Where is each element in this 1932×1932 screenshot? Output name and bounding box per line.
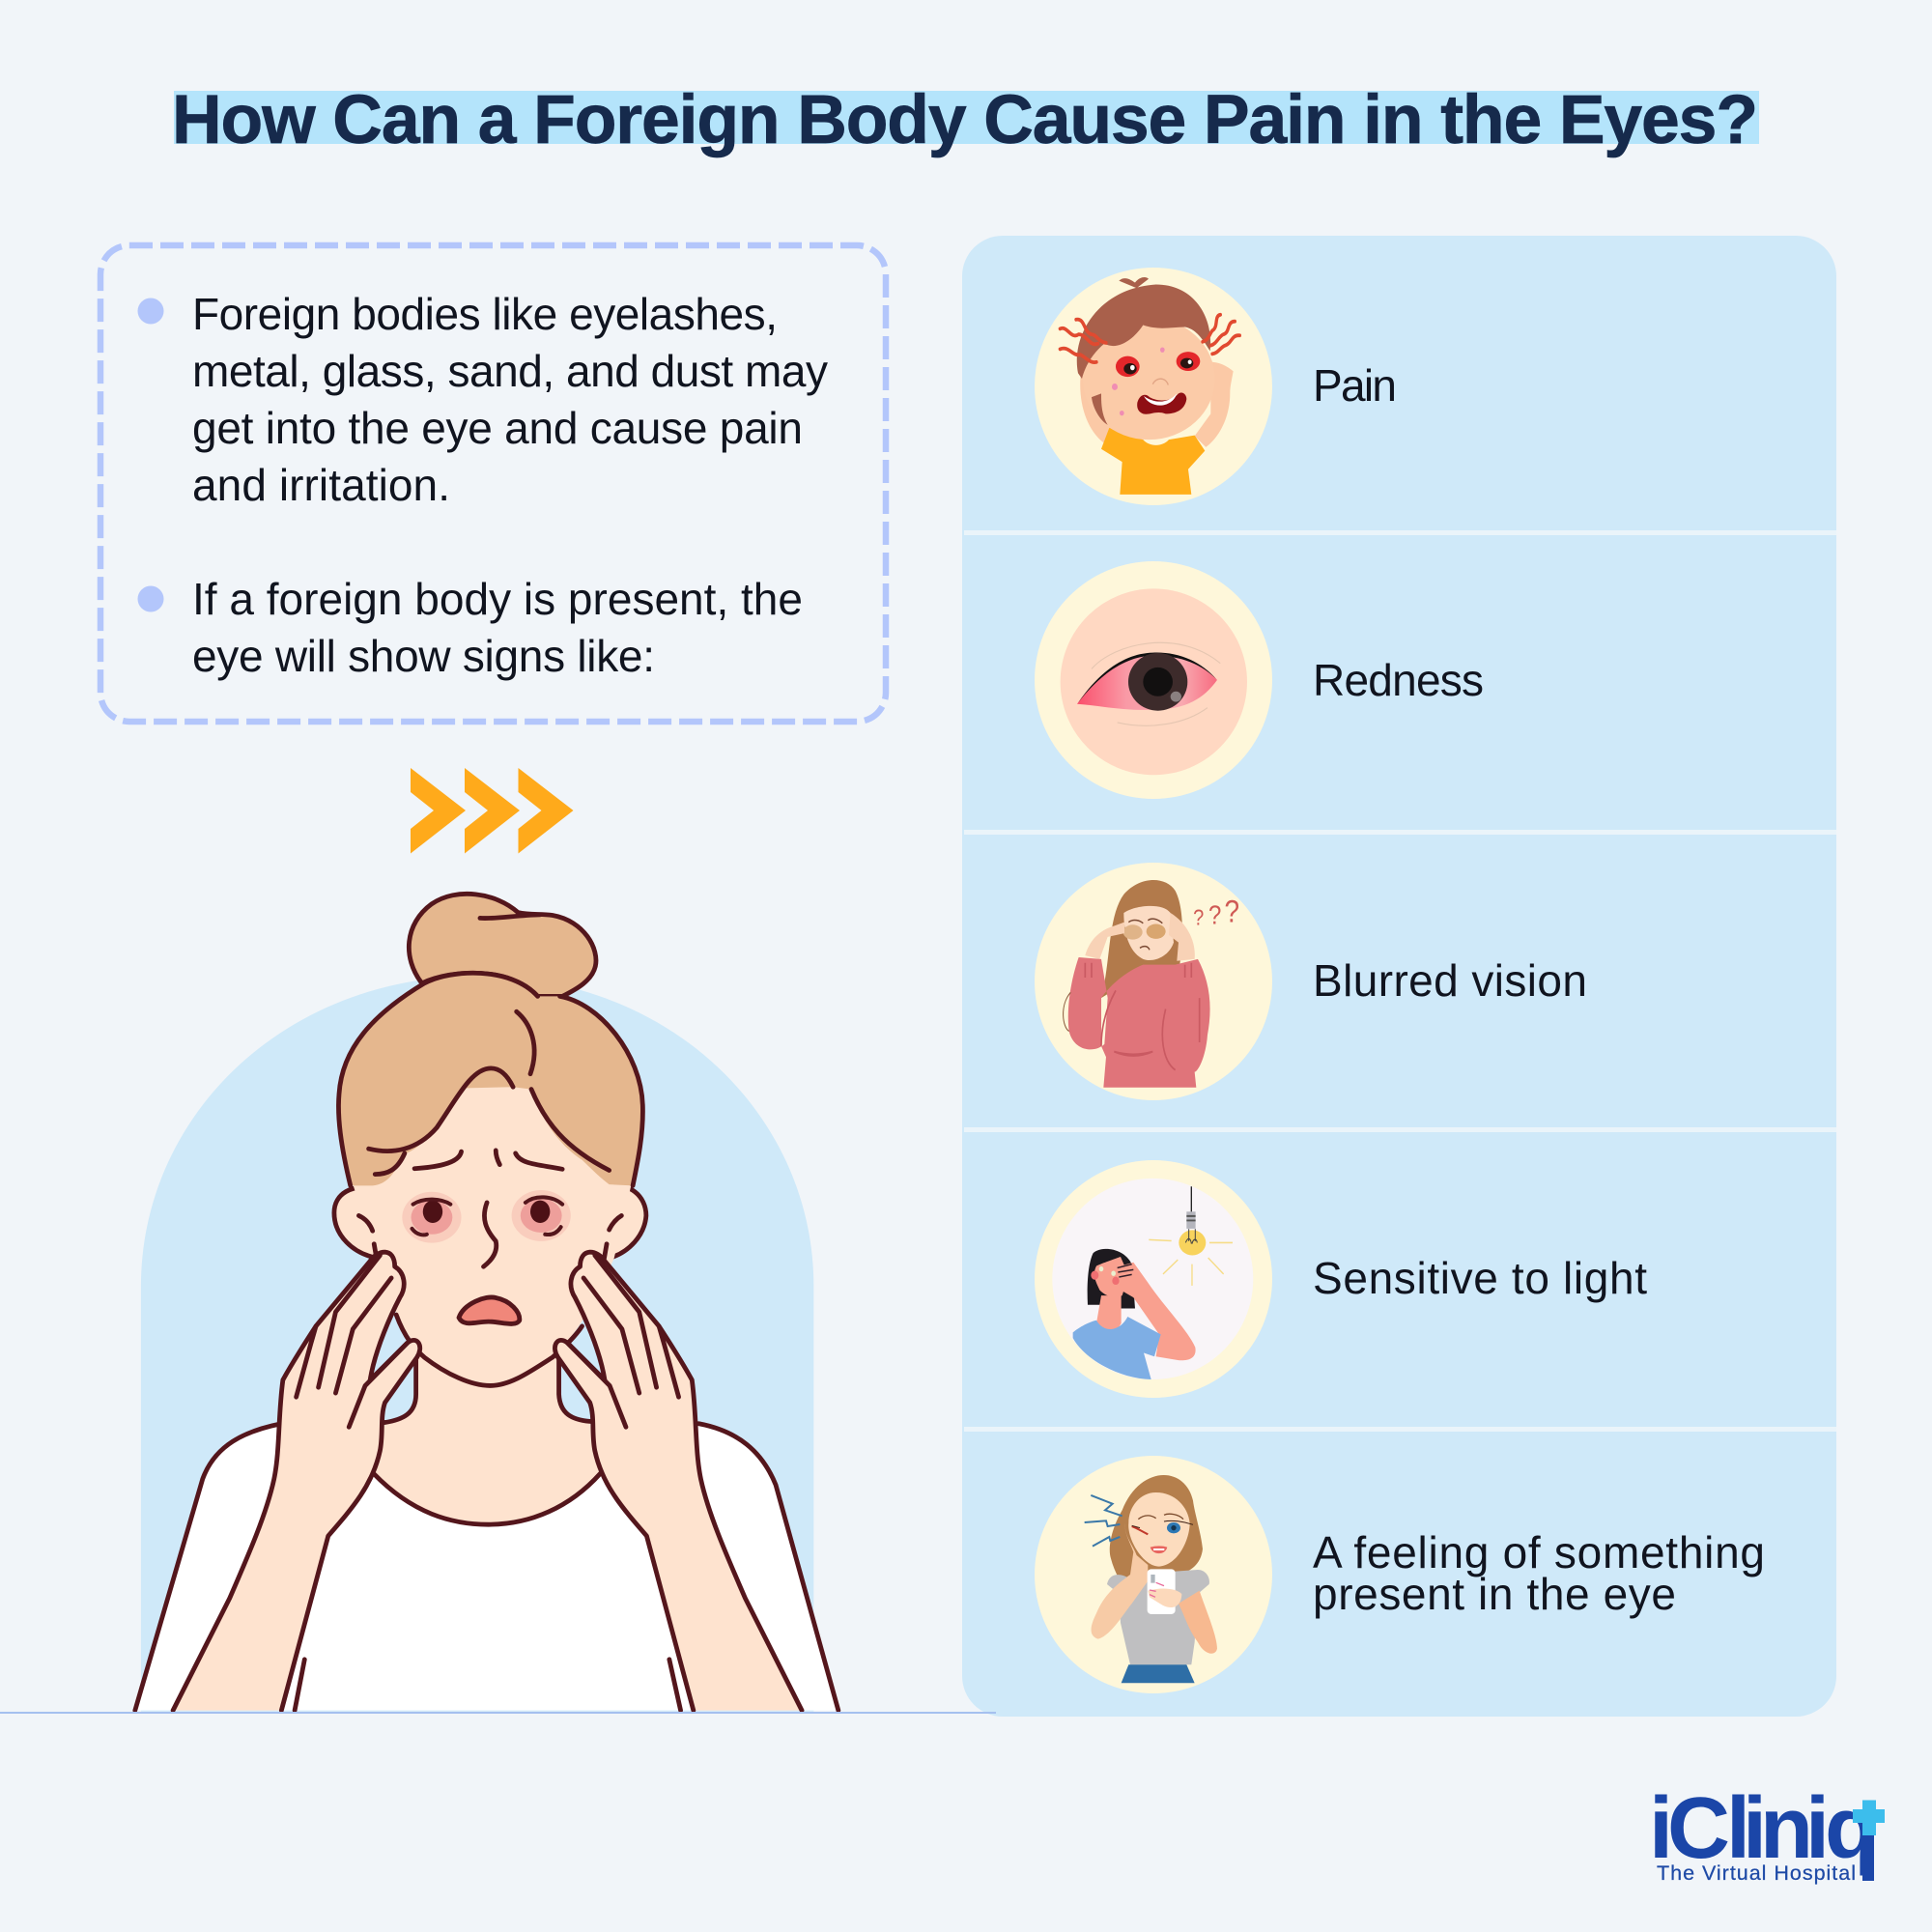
icon: child in pain (1060, 277, 1239, 495)
bullet text: signs: If a foreign body is present, the (192, 574, 803, 624)
bullet text: signs: eye will show signs like: (192, 631, 655, 681)
sore eyes (402, 1192, 462, 1243)
symptom: sensitive to light (1035, 1160, 1647, 1398)
icon: woman with blurred vision: ? (1225, 895, 1239, 929)
bullet text: foreign bodies (137, 289, 828, 510)
logo: iCliniq: iCliniq (1649, 1780, 1878, 1877)
bullet text: foreign bodies: metal, glass, sand, and dust may (192, 346, 828, 396)
ears (334, 1186, 646, 1258)
label: Pain: Pain (1313, 360, 1397, 411)
hair (338, 973, 642, 1185)
hair bun (409, 894, 596, 996)
label: Sensitive to light: Sensitive to light (1313, 1253, 1647, 1303)
hand and arm: left (173, 1252, 420, 1711)
icon: woman shielding eyes from light bulb (1052, 1179, 1253, 1379)
symptom: redness (1035, 561, 1484, 799)
panel: intro text box (100, 245, 886, 722)
title: How Can a Foreign Body Cause Pain in the Eyes? (172, 81, 1758, 158)
icon: woman with blurred vision: ? (1193, 905, 1204, 930)
label: Blurred vision: Blurred vision (1313, 955, 1587, 1006)
bullet text: foreign bodies: Foreign bodies like eyelashes, (192, 289, 778, 339)
icon: woman with blurred vision (1064, 880, 1239, 1088)
label: Redness: Redness (1313, 655, 1484, 705)
panel: symptoms (962, 236, 1836, 1717)
arrow: triple chevrons (411, 768, 574, 854)
symptom: blurred vision (1035, 863, 1587, 1100)
label: feeling of something present: present in the eye (1313, 1569, 1676, 1619)
bullet text: foreign bodies: and irritation. (192, 460, 450, 510)
mouth (459, 1297, 520, 1323)
hand and arm: right (554, 1252, 802, 1711)
label: feeling of something present: A feeling of something (1313, 1527, 1765, 1577)
bullet text: signs (137, 574, 803, 681)
label: feeling of something present (1313, 1527, 1765, 1619)
logo: iCliniq: The Virtual Hospital (1657, 1861, 1856, 1885)
bullet text: foreign bodies: get into the eye and cause pain (192, 403, 803, 453)
illustration: woman with sore eyes (135, 894, 838, 1712)
icon: woman rubbing eye (1085, 1475, 1217, 1683)
symptom: pain (1035, 268, 1397, 505)
icon: red eye (1061, 588, 1247, 775)
icon: woman with blurred vision: ? (1208, 901, 1221, 930)
symptom: feeling of something in the eye (1035, 1456, 1765, 1693)
